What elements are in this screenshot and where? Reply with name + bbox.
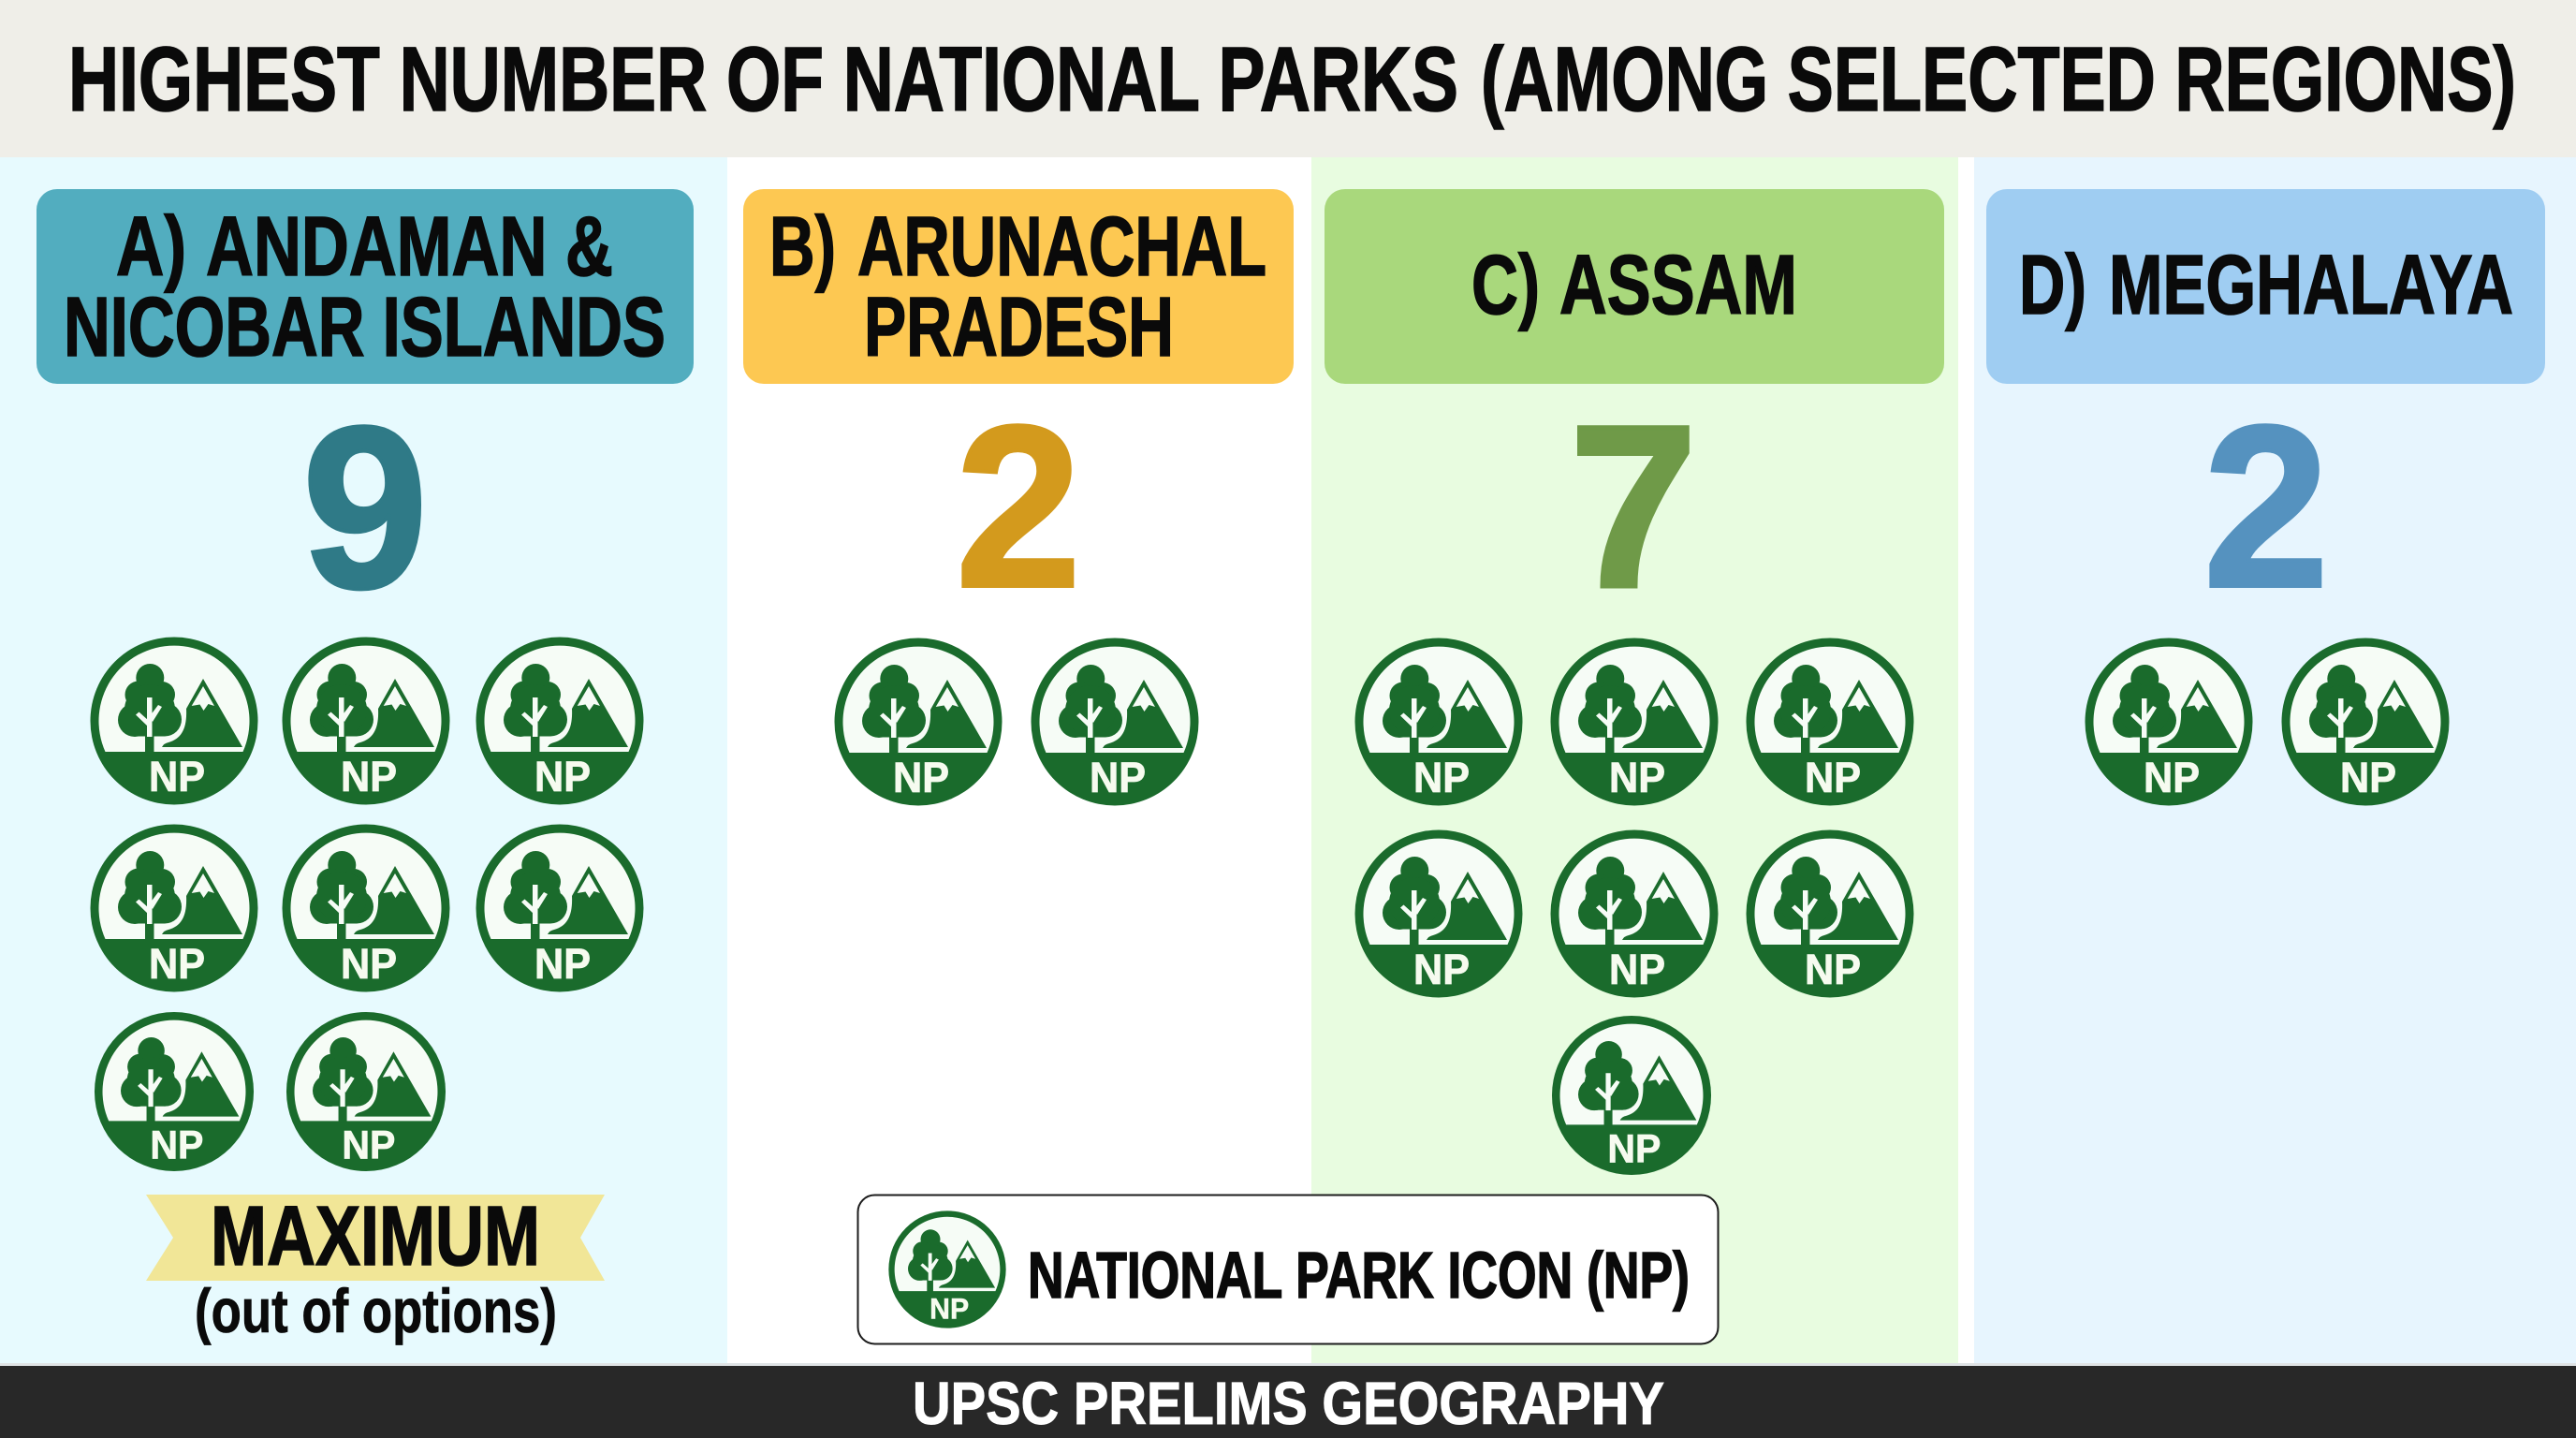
icon: national park emblem: NP [929,1292,969,1326]
count: 2: 2 [2203,378,2329,636]
icon group: 7 national park icons: NP [1413,946,1470,993]
footer band [0,1363,2576,1438]
icon group: 8 national park icons [90,637,644,1171]
icon group: 7 national park icons: NP [1413,754,1470,801]
panel: Andaman and Nicobar Islands [0,157,727,1366]
header: option B: ARUNACHAL [857,200,1266,294]
panel: Assam [1311,157,1958,1366]
header: option D: D) [2019,239,2086,332]
icon group: 8 national park icons: NP [149,753,205,800]
icon group: 2 national park icons [835,638,1198,805]
icon group: 2 national park icons: NP [2340,754,2396,801]
icon group: 7 national park icons: NP [1805,754,1861,801]
icon group: 8 national park icons: NP [341,753,397,800]
legend: national park icon [857,1195,1719,1344]
icon group: 8 national park icons: NP [150,1123,203,1167]
icon group: 8 national park icons: NP [341,940,397,988]
panel: Arunachal Pradesh [727,157,1311,1366]
header: option B [743,189,1294,384]
header: option B: B) [769,200,836,294]
count: 9: 9 [302,379,428,637]
count: 7: 7 [1570,378,1697,636]
icon group: 8 national park icons: NP [149,940,205,988]
note: out of options: (out of options) [195,1276,557,1345]
icon group: 8 national park icons: NP [534,753,591,800]
icon group: 2 national park icons: NP [2144,754,2200,801]
title band: HIGHEST NUMBER OF NATIONAL PARKS [68,28,1458,130]
icon group: 7 national park icons: NP [1609,754,1665,801]
header: option C: ASSAM [1559,239,1797,332]
ribbon: maximum: MAXIMUM [211,1190,540,1284]
icon group: 7 national park icons: NP [1805,946,1861,993]
header: option A: ANDAMAN & [206,200,613,294]
icon group: 7 national park icons: NP [1607,1126,1661,1171]
icon group: 2 national park icons: NP [893,754,949,801]
icon group: 2 national park icons: NP [1090,754,1146,801]
header: option A: NICOBAR ISLANDS [64,281,666,374]
title band [0,0,2576,157]
count: 2: 2 [956,378,1081,636]
icon group: 8 national park icons: NP [342,1123,395,1167]
icon group: 2 national park icons [2086,638,2449,805]
icon group: 7 national park icons: NP [1609,946,1665,993]
header: option B: PRADESH [864,281,1174,374]
header: option D [1986,189,2545,384]
panel: Meghalaya [1974,157,2576,1366]
header: option C [1325,189,1944,384]
footer band: UPSC PRELIMS GEOGRAPHY [913,1370,1664,1437]
icon group: 7 national park icons [1355,638,1913,1175]
header: option A: A) [116,200,186,294]
icon group: 8 national park icons: NP [534,940,591,988]
header: option C: C) [1471,239,1540,332]
legend label: NATIONAL PARK ICON (NP) [1028,1239,1690,1312]
header: option A [37,189,694,384]
icon: national park emblem [888,1211,1006,1328]
